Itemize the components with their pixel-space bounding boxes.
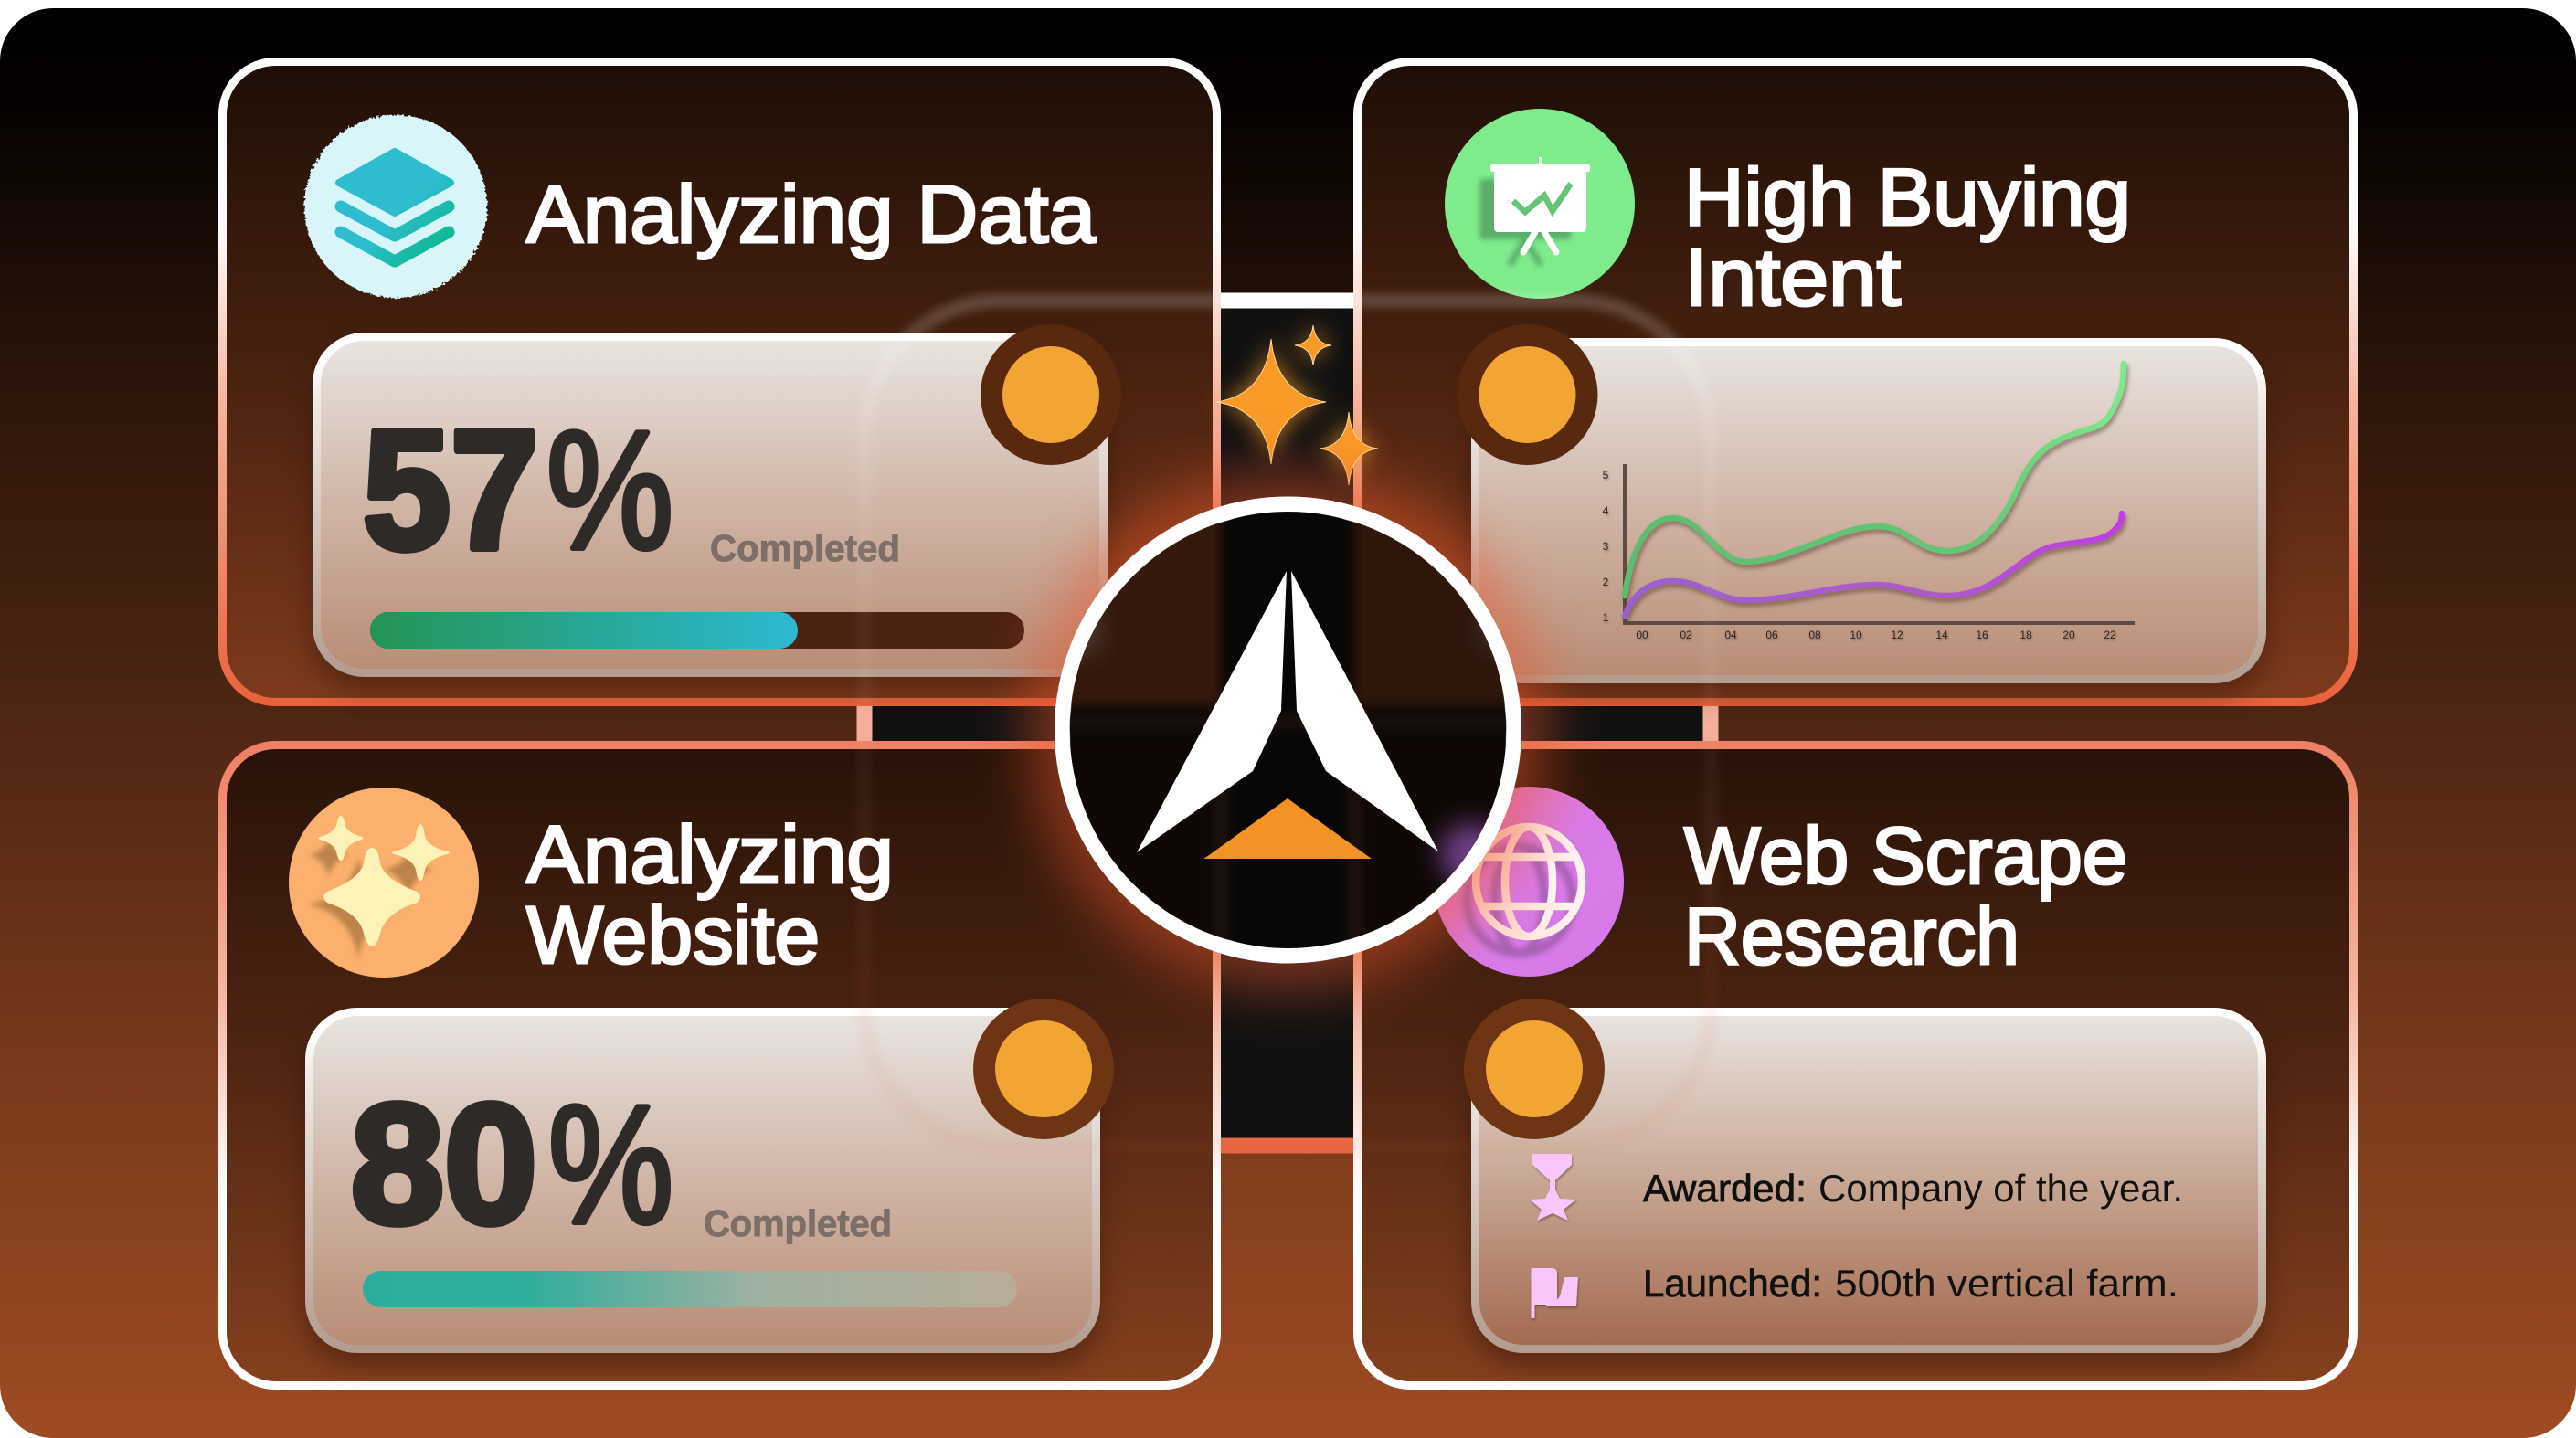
x axis labels: 00 bbox=[1636, 629, 1648, 641]
y axis labels: 1 bbox=[1603, 611, 1609, 624]
stat: 80%: % bbox=[548, 1070, 673, 1258]
card: 80 percent bbox=[309, 1012, 1097, 1348]
icon: sparkles bbox=[289, 788, 479, 978]
central logo badge bbox=[1055, 497, 1521, 963]
title: analyzing data: Analyzing Data bbox=[526, 168, 1097, 259]
logo: right blade bbox=[1291, 571, 1438, 851]
title: high buying intent: High Buying bbox=[1684, 152, 2131, 242]
label: completed: Completed bbox=[704, 1202, 892, 1244]
icon: layers bbox=[304, 115, 487, 298]
icon: flag bbox=[1532, 1268, 1578, 1318]
logo: left blade bbox=[1137, 571, 1287, 852]
title: high buying intent: Intent bbox=[1684, 232, 1901, 322]
x axis labels: 04 bbox=[1724, 629, 1737, 641]
text: launched: Launched: bbox=[1643, 1262, 1822, 1305]
text: launched: 500th vertical farm. bbox=[1835, 1262, 2178, 1305]
text: awarded bbox=[1643, 1167, 2183, 1210]
stat: 57%: 57 bbox=[363, 396, 538, 585]
icon: award bbox=[1530, 1154, 1576, 1221]
title: analyzing website: Analyzing bbox=[526, 809, 894, 900]
y axis labels bbox=[1603, 469, 1609, 624]
x axis labels: 16 bbox=[1976, 629, 1988, 641]
text: awarded: Awarded: bbox=[1643, 1167, 1807, 1210]
card: achievements list bbox=[1475, 1012, 2263, 1348]
title: analyzing website: Website bbox=[526, 889, 820, 980]
y axis labels: 4 bbox=[1603, 504, 1609, 517]
x axis labels: 18 bbox=[2019, 629, 2032, 641]
panel: high buying intent bbox=[1358, 62, 2354, 702]
title: web scrape research: Web Scrape bbox=[1684, 810, 2127, 901]
central window behind panels bbox=[864, 301, 1711, 1146]
x axis labels: 14 bbox=[1935, 629, 1948, 641]
icon: globe bbox=[1434, 787, 1624, 977]
title: web scrape research bbox=[1684, 810, 2127, 981]
title: web scrape research: Research bbox=[1684, 891, 2019, 981]
y axis labels: 3 bbox=[1603, 540, 1609, 553]
panel: web scrape research bbox=[1358, 745, 2354, 1385]
stat: 57%: % bbox=[546, 396, 673, 584]
logo: orange triangle bbox=[1204, 798, 1372, 859]
progress bar 57 bbox=[370, 612, 1024, 649]
sparkles above logo bbox=[1216, 325, 1378, 485]
x axis labels: 08 bbox=[1808, 629, 1821, 641]
marker: card 2 dot bbox=[1457, 324, 1597, 465]
x axis labels: 10 bbox=[1850, 629, 1862, 641]
stat: 80%: 80 bbox=[351, 1070, 537, 1259]
progress bar 80 bbox=[363, 1271, 1017, 1307]
y axis labels: 2 bbox=[1603, 576, 1609, 588]
line: purple series bbox=[1625, 513, 2122, 617]
y axis labels: 5 bbox=[1603, 469, 1609, 481]
x axis labels: 12 bbox=[1891, 629, 1903, 641]
marker: card 1 dot bbox=[981, 324, 1121, 465]
stat: 80% bbox=[351, 1070, 673, 1259]
card: line chart bbox=[1475, 342, 2263, 680]
card: 57 percent bbox=[316, 336, 1104, 672]
x axis labels: 20 bbox=[2062, 629, 2075, 641]
title: analyzing website bbox=[526, 809, 894, 980]
label: completed: Completed bbox=[710, 527, 900, 569]
panel: analyzing website bbox=[223, 745, 1217, 1385]
x axis labels bbox=[1636, 629, 2116, 641]
line: green series bbox=[1625, 364, 2124, 596]
text: awarded: Company of the year. bbox=[1818, 1167, 2183, 1210]
panel: analyzing data bbox=[223, 62, 1217, 702]
text: launched bbox=[1643, 1262, 2178, 1305]
title: high buying intent bbox=[1684, 152, 2131, 322]
marker: card 4 dot bbox=[1464, 999, 1605, 1139]
marker: card 3 dot bbox=[973, 999, 1114, 1139]
x axis labels: 02 bbox=[1680, 629, 1692, 641]
stat: 57% bbox=[363, 396, 673, 585]
x axis labels: 22 bbox=[2104, 629, 2116, 641]
x axis labels: 06 bbox=[1765, 629, 1778, 641]
icon: presentation board bbox=[1445, 109, 1635, 299]
line chart bbox=[1603, 364, 2135, 641]
